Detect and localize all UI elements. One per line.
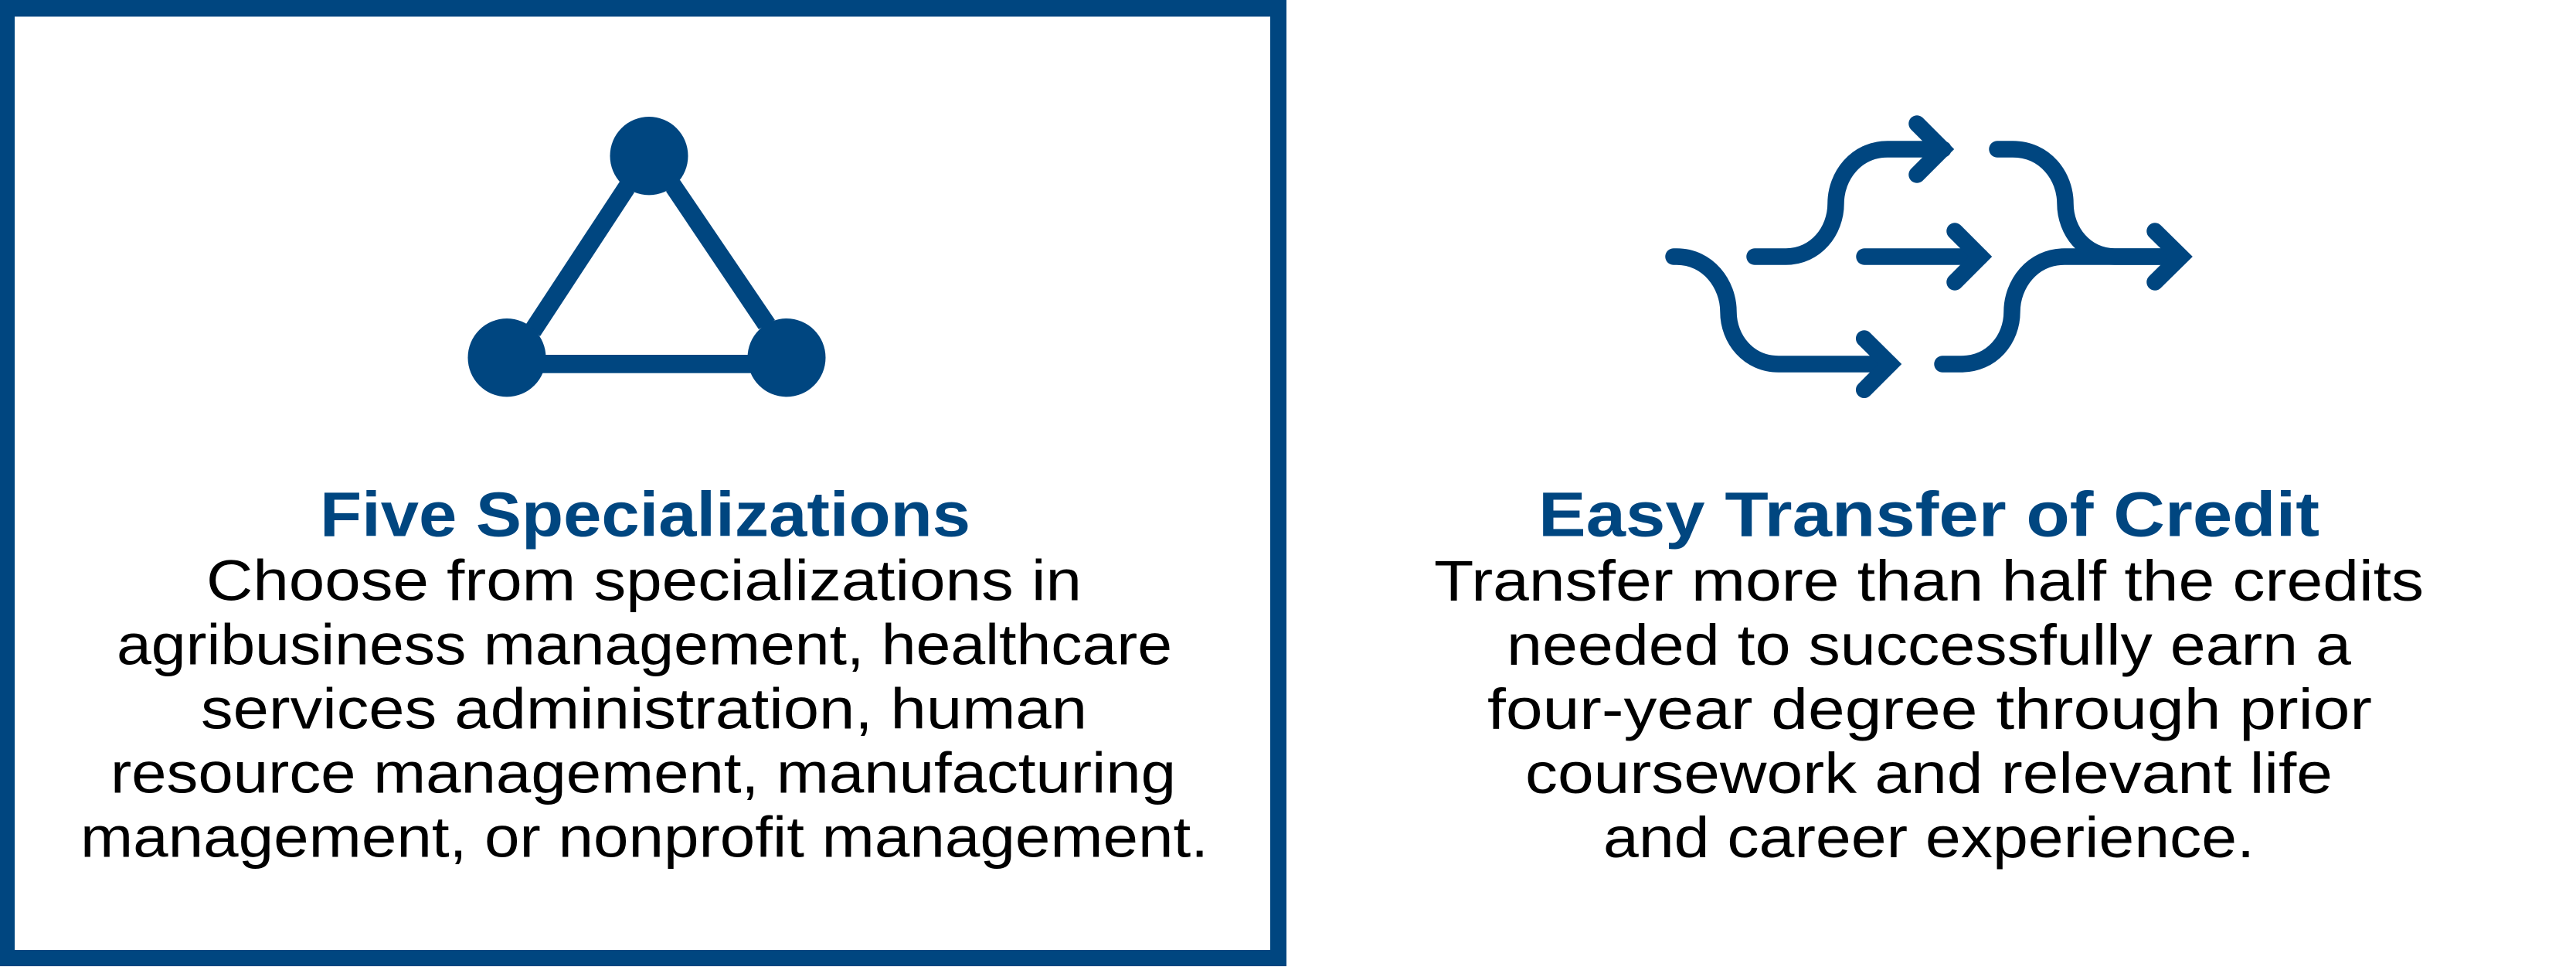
panel: easy transfer of credit (1434, 124, 2424, 870)
text block: transfer description: needed to successfully earn a (1507, 613, 2352, 677)
text block: transfer description: coursework and relevant life (1525, 741, 2333, 805)
text block: transfer description: four-year degree through prior (1487, 677, 2372, 741)
text block: specializations description (80, 549, 1208, 869)
text block: transfer description: Transfer more than half the credits (1434, 549, 2424, 613)
text block: specializations description: agribusiness management, healthcare (117, 612, 1172, 677)
text block: transfer description: and career experience. (1603, 805, 2255, 870)
heading: easy transfer of credit: Easy Transfer of Credit (1538, 479, 2319, 550)
panel: five specializations (0, 0, 1286, 966)
icon: connected triangle (468, 117, 825, 397)
text block: specializations description: Choose from specializations in (206, 549, 1082, 612)
text block: specializations description: management, or nonprofit management. (80, 805, 1208, 869)
text block: specializations description: services administration, human (201, 677, 1087, 741)
text block: specializations description: resource management, manufacturing (110, 741, 1176, 805)
text block: transfer description (1434, 549, 2424, 870)
icon: merging arrows (1674, 124, 2180, 390)
heading: five specializations: Five Specializations (320, 479, 970, 550)
panel border (0, 0, 1286, 966)
